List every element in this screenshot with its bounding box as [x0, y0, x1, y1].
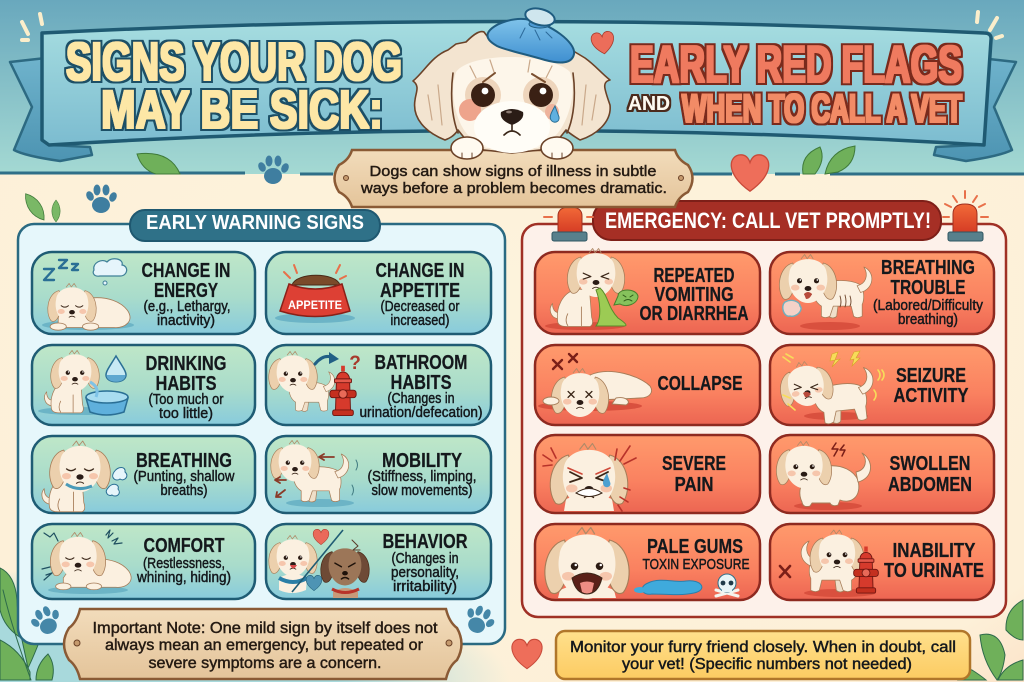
- card: mobility: slow movements): [372, 483, 472, 499]
- card: change in energy: CHANGE IN: [142, 260, 230, 282]
- icon: heart right of plaque: [731, 155, 769, 191]
- card: collapse: [535, 345, 760, 425]
- card: swollen abdomen: SWOLLEN: [890, 453, 970, 475]
- card: bathroom habits: (Changes in: [388, 391, 454, 407]
- icon: leaves under banner right: [803, 146, 855, 174]
- card: swollen abdomen: ABDOMEN: [888, 474, 972, 496]
- card: seizure activity: ACTIVITY: [894, 385, 969, 407]
- sparkle marks: top right: [977, 12, 1002, 38]
- card: pale gums toxin exposure: PALE GUMS: [647, 536, 743, 558]
- card: severe pain: [535, 435, 760, 513]
- card: comfort: COMFORT: [144, 535, 224, 557]
- hero dog with ice bag: [413, 6, 610, 159]
- card: breathing: [32, 436, 255, 513]
- icon: siren left: [544, 207, 593, 241]
- card: change in appetite: APPETITE: [288, 298, 342, 312]
- heading: early warning signs: EARLY WARNING SIGNS: [146, 212, 364, 234]
- card: seizure activity: [770, 345, 994, 426]
- card: breathing: BREATHING: [136, 450, 232, 472]
- card: behavior: personality,: [391, 565, 459, 581]
- card: drinking habits: too little): [159, 406, 213, 422]
- ribbon tails: [10, 58, 1016, 161]
- title: signs your dog may be sick: [66, 32, 402, 140]
- card: repeated vomiting or diarrhea: OR DIARRHEA: [640, 303, 748, 325]
- card: change in energy: [32, 252, 255, 334]
- card: comfort: (Restlessness,: [143, 556, 225, 572]
- icon: leaves bottom right: [958, 600, 1023, 680]
- card: mobility: (Stiffness, limping,: [368, 469, 476, 485]
- card: repeated vomiting or diarrhea: [535, 248, 760, 334]
- callout: monitor your furry friend: your vet! (Specific numbers not needed): [622, 656, 912, 673]
- card: breathing trouble: TROUBLE: [890, 277, 966, 299]
- card: breathing trouble: [770, 252, 994, 334]
- note plaque: Important Note: One mild sign by itself does not: [92, 620, 438, 637]
- card: inability to urinate: INABILITY: [892, 540, 976, 562]
- heading: emergency call vet promptly: EMERGENCY: CALL VET PROMPTLY!: [605, 208, 931, 233]
- card: change in appetite: APPETITE: [380, 280, 460, 302]
- icon: paw top: [257, 156, 290, 184]
- card: swollen abdomen: [770, 435, 994, 513]
- card: breathing trouble: breathing): [898, 312, 958, 328]
- note plaque: always mean an emergency, but repeated or: [105, 637, 424, 654]
- card: repeated vomiting or diarrhea: VOMITING: [654, 284, 734, 306]
- card: change in appetite: (Decreased or: [380, 299, 460, 315]
- card: breathing trouble: (Labored/Difficulty: [873, 298, 984, 314]
- card: breathing: breaths): [160, 483, 208, 499]
- card: change in energy: (e.g., Lethargy,: [144, 299, 230, 315]
- card: breathing trouble: BREATHING: [881, 257, 975, 279]
- icon: heart near title: [590, 31, 616, 55]
- title banner: [42, 22, 991, 145]
- panel: emergency: [522, 191, 1006, 617]
- card: seizure activity: SEIZURE: [896, 365, 966, 387]
- card: behavior: BEHAVIOR: [382, 531, 468, 553]
- icon: leaf sprig left: [21, 190, 60, 223]
- card: comfort: whining, hiding): [136, 570, 231, 586]
- note plaque: severe symptoms are a concern.: [148, 655, 382, 672]
- callout: monitor your furry friend: Monitor your furry friend closely. When in doubt, call: [570, 639, 956, 656]
- card: breathing: (Punting, shallow: [134, 469, 235, 485]
- callout: monitor your furry friend: [556, 631, 970, 679]
- icon: paw left: [85, 184, 118, 213]
- card: bathroom habits: [266, 345, 491, 425]
- card: change in appetite: increased): [390, 313, 450, 329]
- card: behavior: (Changes in: [392, 551, 458, 567]
- title: signs your dog may be sick: MAY BE SICK:: [101, 80, 383, 140]
- card: drinking habits: (Too much or: [148, 392, 224, 408]
- card: comfort: [32, 524, 255, 599]
- card: behavior: irritability): [393, 579, 457, 595]
- card: drinking habits: DRINKING: [146, 353, 226, 375]
- panel: early warning signs: [18, 210, 505, 644]
- card: bathroom habits: BATHROOM: [374, 352, 468, 374]
- heading: emergency call vet promptly: [593, 201, 941, 240]
- card: inability to urinate: TO URINATE: [884, 560, 984, 582]
- icon: leaf under banner left: [137, 153, 180, 174]
- card: change in appetite: CHANGE IN: [376, 260, 464, 282]
- card: behavior: [266, 524, 491, 599]
- subtitle plaque: ways before a problem becomes dramatic.: [360, 180, 667, 197]
- title: signs your dog may be sick: SIGNS YOUR DOG: [66, 32, 402, 92]
- card: collapse: COLLAPSE: [658, 373, 742, 395]
- card: repeated vomiting or diarrhea: REPEATED: [654, 265, 734, 287]
- card: change in appetite: [266, 252, 491, 334]
- icon: paw panel left: [26, 602, 67, 640]
- card: bathroom habits: HABITS: [390, 372, 452, 394]
- title: early red flags and when to call a vet: AND: [628, 93, 670, 115]
- card: change in energy: ENERGY: [154, 280, 218, 302]
- sparkle marks: top left: [22, 14, 42, 40]
- card: bathroom habits: urination/defecation): [360, 405, 482, 421]
- card: drinking habits: [32, 345, 255, 425]
- icon: heart bottom: [512, 639, 542, 669]
- card: severe pain: PAIN: [674, 474, 714, 496]
- title: early red flags and when to call a vet: [628, 36, 962, 131]
- card: change in energy: inactivity): [157, 313, 215, 329]
- card: severe pain: SEVERE: [662, 453, 726, 475]
- note plaque: [64, 609, 462, 679]
- subtitle plaque: [334, 150, 692, 207]
- card: mobility: [266, 436, 491, 513]
- subtitle plaque: Dogs can show signs of illness in subtle: [370, 163, 656, 180]
- card: bathroom habits: ?: [349, 353, 361, 374]
- card: mobility: MOBILITY: [382, 450, 463, 472]
- icon: leaves bottom left: [0, 568, 53, 680]
- card: pale gums toxin exposure: TOXIN EXPOSURE: [642, 557, 750, 573]
- card: pale gums toxin exposure: [535, 524, 760, 600]
- heading: early warning signs: [130, 210, 380, 241]
- card: drinking habits: HABITS: [156, 373, 216, 395]
- icon: paw panel right: [459, 601, 500, 639]
- icon: siren right: [943, 191, 988, 241]
- card: inability to urinate: [770, 524, 994, 600]
